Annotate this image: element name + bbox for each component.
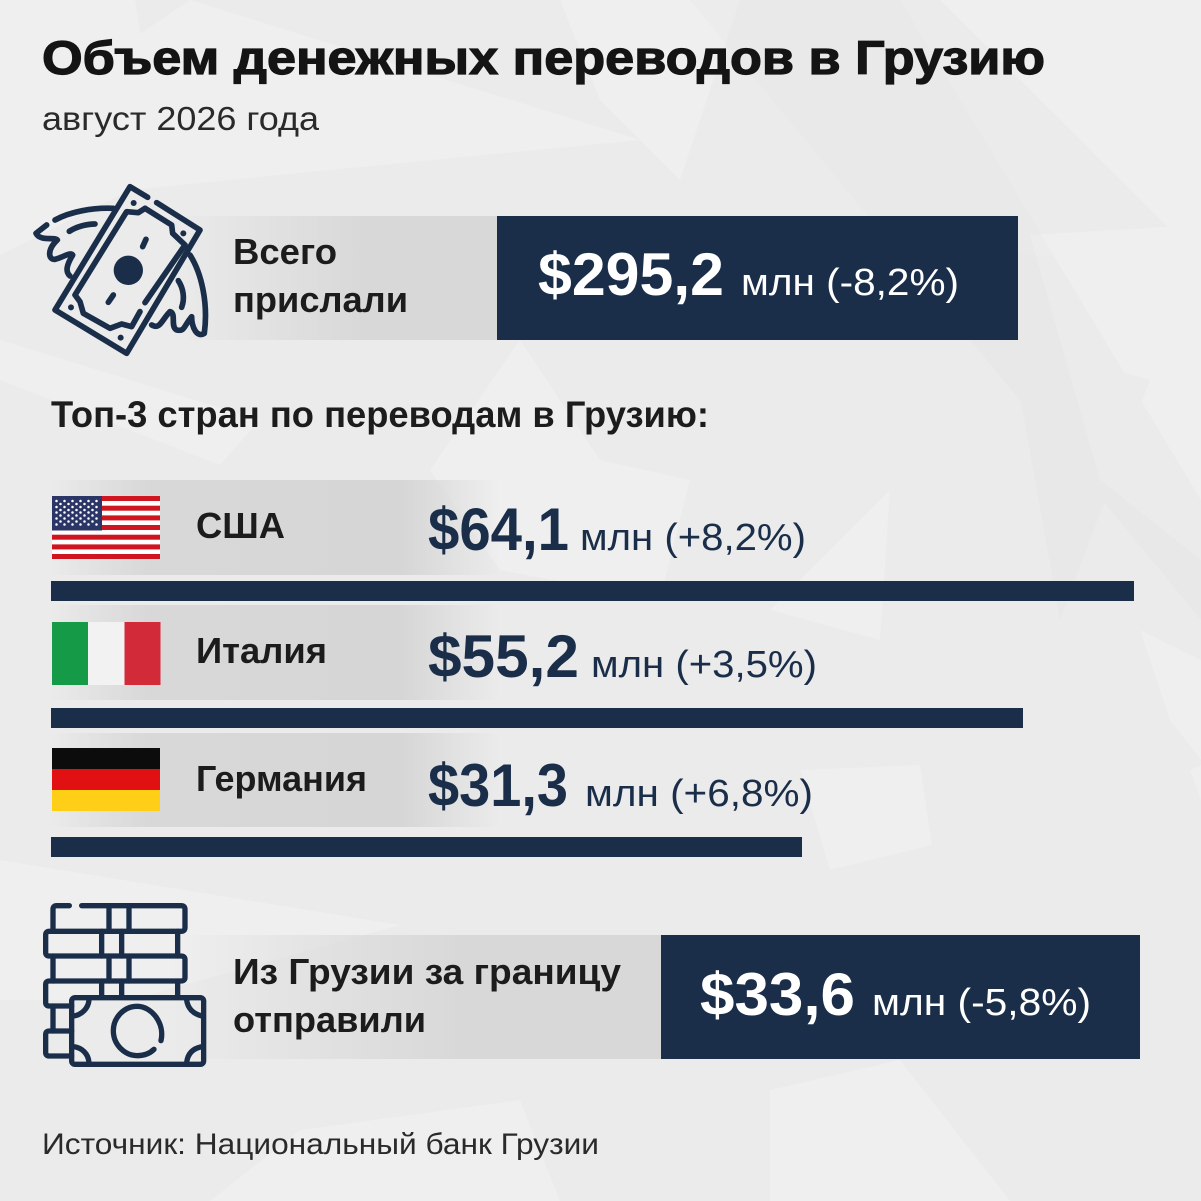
row: Italy xyxy=(50,605,1023,728)
row: Germany: млн (+6,8%) xyxy=(585,773,813,815)
row: Germany xyxy=(50,733,813,857)
subtitle: август 2026 года xyxy=(42,100,320,137)
value box xyxy=(497,216,1018,340)
label band xyxy=(170,216,497,340)
row: USA: млн (+8,2%) xyxy=(580,517,806,559)
icon: German flag xyxy=(52,748,160,811)
country: Германия xyxy=(196,758,367,799)
bar xyxy=(51,708,1023,728)
value: $64,1 xyxy=(428,496,569,563)
band xyxy=(50,480,500,575)
value box xyxy=(661,935,1140,1059)
panel: sent abroad xyxy=(46,906,1140,1064)
value xyxy=(538,241,959,308)
value: $295,2 xyxy=(538,241,724,308)
label band xyxy=(170,935,661,1059)
source: Источник: Национальный банк Грузии xyxy=(42,1128,599,1161)
icon: Italian flag xyxy=(52,622,160,685)
bar xyxy=(51,837,802,857)
label: Из Грузии за границу xyxy=(233,951,621,992)
panel: total received xyxy=(36,187,1018,353)
label: прислали xyxy=(233,279,408,320)
bar xyxy=(51,581,1134,601)
label: отправили xyxy=(233,999,426,1040)
label: Всего xyxy=(233,231,337,272)
value: $33,6 xyxy=(700,961,855,1028)
icon: US flag xyxy=(52,496,160,559)
icon: flying banknote xyxy=(36,187,205,353)
title: Объем денежных переводов в Грузию xyxy=(42,31,1045,84)
band xyxy=(50,733,500,827)
icon: stack of money xyxy=(46,906,204,1064)
value: $31,3 xyxy=(428,752,568,819)
country: США xyxy=(196,505,285,546)
value: $55,2 xyxy=(428,623,579,690)
value xyxy=(700,961,1091,1028)
row: USA xyxy=(50,480,1134,601)
country: Италия xyxy=(196,630,327,671)
heading: top 3: Топ-3 стран по переводам в Грузию: xyxy=(51,394,709,435)
value: млн (-5,8%) xyxy=(872,982,1091,1024)
value: млн (-8,2%) xyxy=(741,262,959,304)
row: Italy: млн (+3,5%) xyxy=(591,644,817,686)
band xyxy=(50,605,500,700)
